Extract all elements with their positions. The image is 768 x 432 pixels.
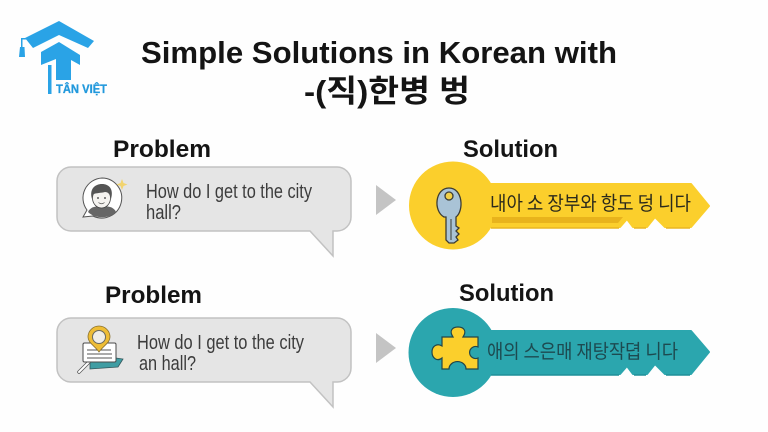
heading: Solution: Solution: [459, 280, 554, 307]
problem text: hall?: [146, 202, 181, 224]
panel: first problem: [57, 136, 351, 256]
logo: Tan Viet: [19, 21, 107, 96]
icon: puzzle piece: [432, 327, 478, 369]
problem text: How do I get to the city: [137, 332, 304, 354]
solution text: 내아 소 장부와 항도 덩 니다: [490, 187, 691, 216]
icon: graduation cap: [19, 21, 94, 94]
speech bubble: [57, 167, 351, 256]
panel: second problem: [57, 282, 351, 407]
panel: second solution: [408, 280, 709, 397]
title: Simple Solutions in Korean with: [141, 35, 617, 70]
problem text: How do I get to the city: [146, 181, 312, 203]
heading: Problem: Problem: [105, 282, 202, 309]
icon: key: [437, 188, 461, 243]
logo wordmark: TÂN VIỆT: [56, 83, 107, 96]
title: -(직)한병 벙: [304, 74, 470, 109]
problem text: [146, 181, 312, 224]
speech bubble: [57, 318, 351, 407]
arrow: second problem to solution: [376, 333, 396, 363]
icon: map pin on document with magnifier: [79, 326, 123, 372]
problem text: an hall?: [139, 353, 196, 375]
heading: Problem: Problem: [113, 136, 211, 163]
problem text: [137, 332, 304, 375]
panel: first solution: [409, 136, 709, 250]
icon: person in chat circle: [83, 178, 128, 218]
heading: Solution: Solution: [463, 136, 558, 163]
teal key shape: [408, 308, 709, 397]
yellow key shape: [409, 162, 709, 250]
arrow: first problem to solution: [376, 185, 396, 215]
title: [141, 35, 617, 109]
solution text: 애의 스은매 재탕작뎝 니다: [487, 335, 678, 364]
